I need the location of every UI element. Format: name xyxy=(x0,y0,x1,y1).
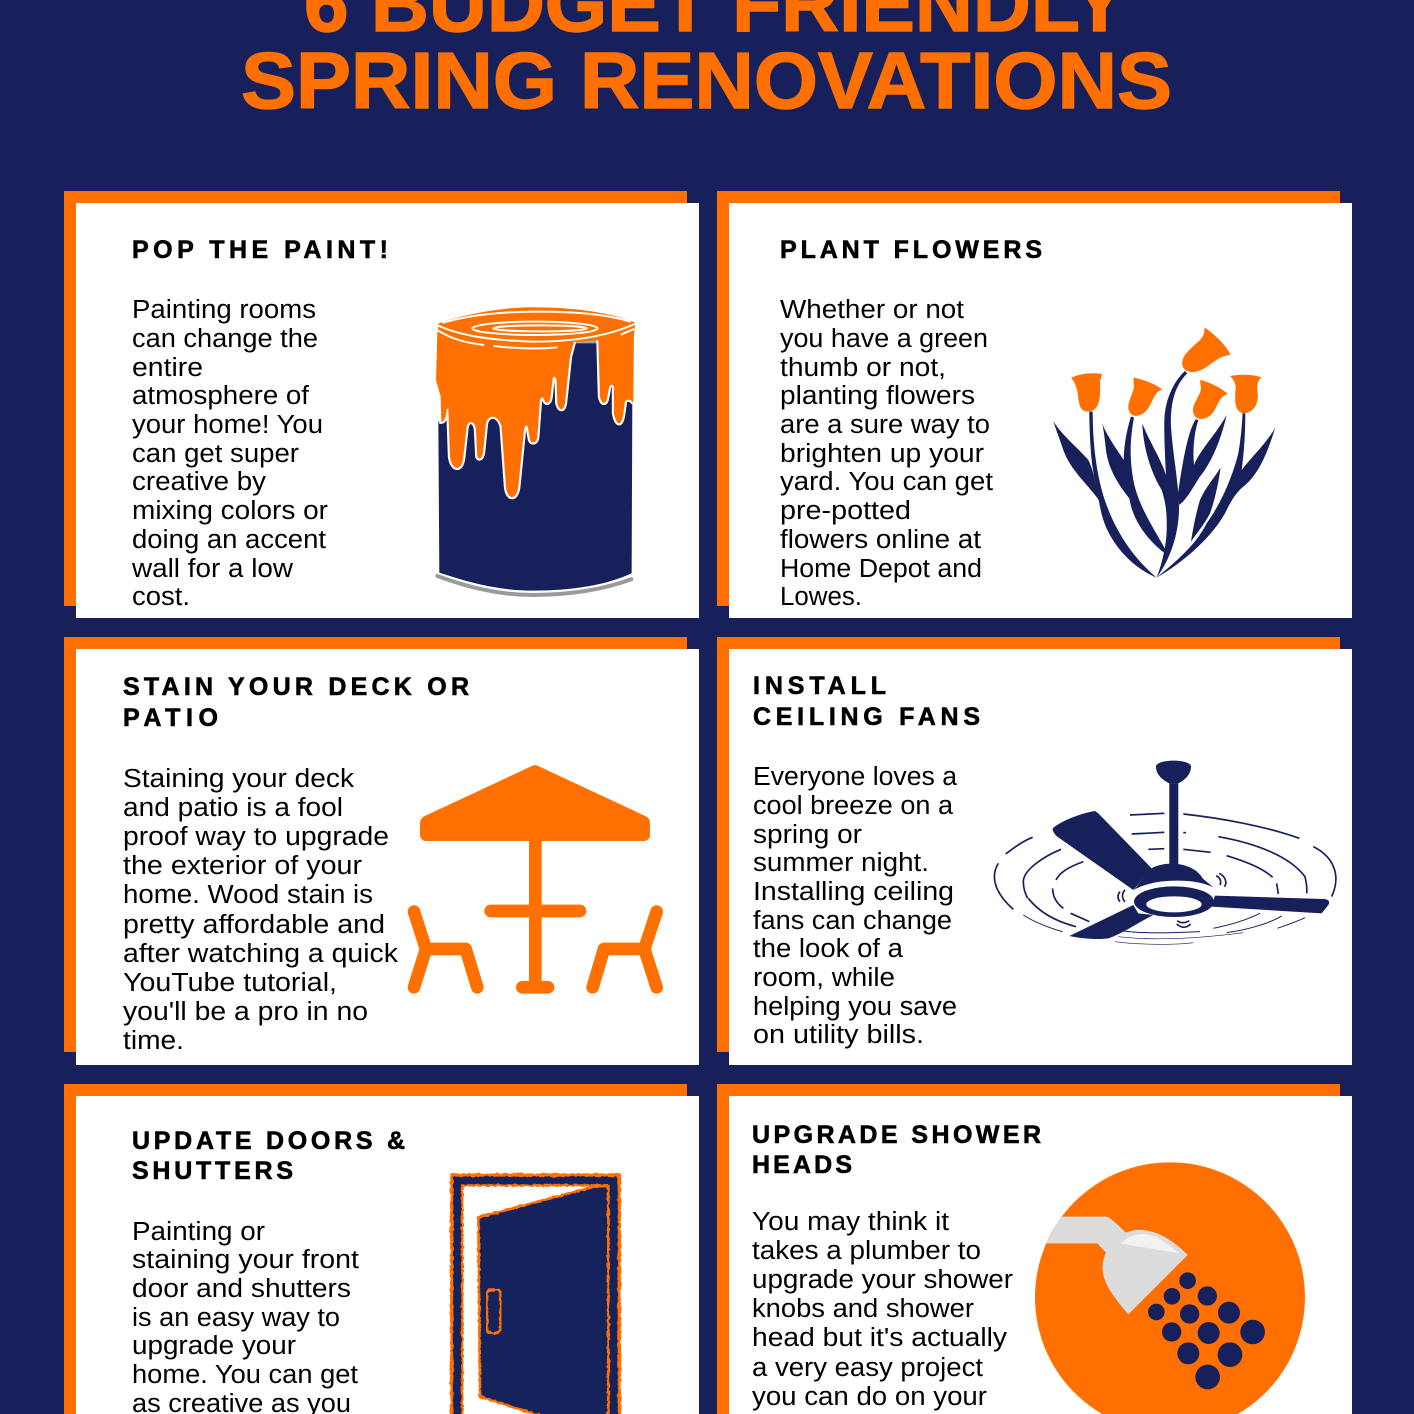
body text: doors and shutters: home. You can get xyxy=(132,1361,358,1389)
body text: stain your deck: you'll be a pro in no xyxy=(123,998,368,1026)
title: SPRING RENOVATIONS xyxy=(241,36,1172,125)
heading: pop the paint: POP THE PAINT! xyxy=(132,236,388,264)
icon: patio umbrella table and chairs xyxy=(414,765,657,988)
body text: pop the paint: mixing colors or xyxy=(132,497,329,525)
title xyxy=(241,0,1172,125)
body text: plant flowers: flowers online at xyxy=(780,526,981,554)
icon: shower head xyxy=(1035,1162,1305,1414)
body text: stain your deck xyxy=(123,765,398,1055)
body text: doors and shutters: upgrade your xyxy=(132,1332,297,1360)
body text: ceiling fans xyxy=(753,763,958,1049)
body text: shower heads: a very easy project xyxy=(752,1354,983,1382)
panel: stain your deck xyxy=(64,637,699,1065)
icon: flowers xyxy=(1053,327,1275,578)
body text: pop the paint: entire xyxy=(132,354,203,382)
body text: stain your deck: time. xyxy=(123,1027,184,1055)
heading: upgrade shower heads xyxy=(752,1121,1041,1179)
panel: pop the paint xyxy=(64,191,699,618)
body text: pop the paint xyxy=(131,296,329,611)
body text: pop the paint: creative by xyxy=(132,468,266,496)
body text: plant flowers: thumb or not, xyxy=(780,354,946,382)
heading: stain your deck or patio: PATIO xyxy=(123,704,218,732)
body text: ceiling fans: summer night. xyxy=(753,849,929,877)
body text: pop the paint: doing an accent xyxy=(132,526,326,554)
body text: ceiling fans: spring or xyxy=(753,821,863,849)
body text: stain your deck: and patio is a fool xyxy=(123,794,343,822)
body text: ceiling fans: helping you save xyxy=(753,993,957,1021)
body text: pop the paint: can get super xyxy=(132,440,300,468)
body text: doors and shutters: Painting or xyxy=(132,1218,266,1246)
body text: pop the paint: wall for a low xyxy=(131,555,294,583)
body text: doors and shutters: is an easy way to xyxy=(132,1304,340,1332)
body text: pop the paint: cost. xyxy=(132,583,190,611)
body text: pop the paint: your home! You xyxy=(132,411,323,439)
icon: paint can xyxy=(436,307,635,595)
body text: plant flowers: Lowes. xyxy=(780,583,862,611)
body text: plant flowers: are a sure way to xyxy=(780,411,990,439)
heading: stain your deck or patio: STAIN YOUR DECK OR xyxy=(123,673,469,701)
body text: plant flowers: Home Depot and xyxy=(780,555,982,583)
body text: ceiling fans: Installing ceiling xyxy=(753,878,954,906)
body text: ceiling fans: room, while xyxy=(753,964,895,992)
heading: install ceiling fans: INSTALL xyxy=(753,672,886,700)
body text: pop the paint: atmosphere of xyxy=(132,382,310,410)
body text: shower heads: knobs and shower xyxy=(752,1295,975,1323)
body text: stain your deck: proof way to upgrade xyxy=(123,823,389,851)
body text: plant flowers: brighten up your xyxy=(780,440,985,468)
body text: stain your deck: Staining your deck xyxy=(123,765,354,793)
icon: ceiling fan xyxy=(994,761,1336,944)
panel: install ceiling fans xyxy=(717,637,1352,1065)
body text: stain your deck: the exterior of your xyxy=(123,852,363,880)
heading: update doors and shutters: UPDATE DOORS & xyxy=(132,1127,405,1155)
body text: pop the paint: can change the xyxy=(132,325,318,353)
panel: update doors and shutters xyxy=(64,1084,699,1414)
body text: shower heads: head but it's actually xyxy=(752,1324,1007,1352)
heading: upgrade shower heads: UPGRADE SHOWER xyxy=(752,1121,1041,1149)
heading: install ceiling fans xyxy=(753,672,980,731)
body text: shower heads: takes a plumber to xyxy=(752,1237,981,1265)
body text: plant flowers: planting flowers xyxy=(780,382,975,410)
panel: upgrade shower heads xyxy=(717,1084,1352,1414)
heading: stain your deck or patio xyxy=(123,673,469,732)
body text: ceiling fans: cool breeze on a xyxy=(753,792,954,820)
body text: doors and shutters: staining your front xyxy=(132,1246,359,1274)
body text: stain your deck: pretty affordable and xyxy=(123,911,385,939)
heading: upgrade shower heads: HEADS xyxy=(752,1151,852,1179)
body text: shower heads: you can do on your xyxy=(752,1383,988,1411)
body text: plant flowers: Whether or not xyxy=(780,296,964,324)
body text: ceiling fans: fans can change xyxy=(753,907,952,935)
body text: plant flowers: pre-potted xyxy=(780,497,911,525)
heading: update doors and shutters: SHUTTERS xyxy=(132,1157,293,1185)
body text: doors and shutters: door and shutters xyxy=(132,1275,351,1303)
body text: plant flowers xyxy=(780,296,993,611)
heading: install ceiling fans: CEILING FANS xyxy=(753,703,980,731)
body text: ceiling fans: on utility bills. xyxy=(753,1021,924,1049)
body text: stain your deck: home. Wood stain is xyxy=(123,881,373,909)
body text: plant flowers: you have a green xyxy=(780,325,988,353)
body text: plant flowers: yard. You can get xyxy=(780,468,993,496)
body text: pop the paint: Painting rooms xyxy=(132,296,316,324)
body text: ceiling fans: the look of a xyxy=(753,935,904,963)
body text: ceiling fans: Everyone loves a xyxy=(753,763,958,791)
body text: shower heads xyxy=(752,1208,1014,1411)
body text: shower heads: upgrade your shower xyxy=(752,1266,1014,1294)
heading: update doors and shutters xyxy=(132,1127,405,1185)
body text: stain your deck: after watching a quick xyxy=(123,940,398,968)
body text: shower heads: You may think it xyxy=(752,1208,949,1236)
icon: door xyxy=(452,1175,619,1414)
heading: plant flowers: PLANT FLOWERS xyxy=(780,236,1042,264)
body text: stain your deck: YouTube tutorial, xyxy=(123,969,337,997)
panel: plant flowers xyxy=(717,191,1352,618)
body text: doors and shutters xyxy=(132,1218,359,1414)
